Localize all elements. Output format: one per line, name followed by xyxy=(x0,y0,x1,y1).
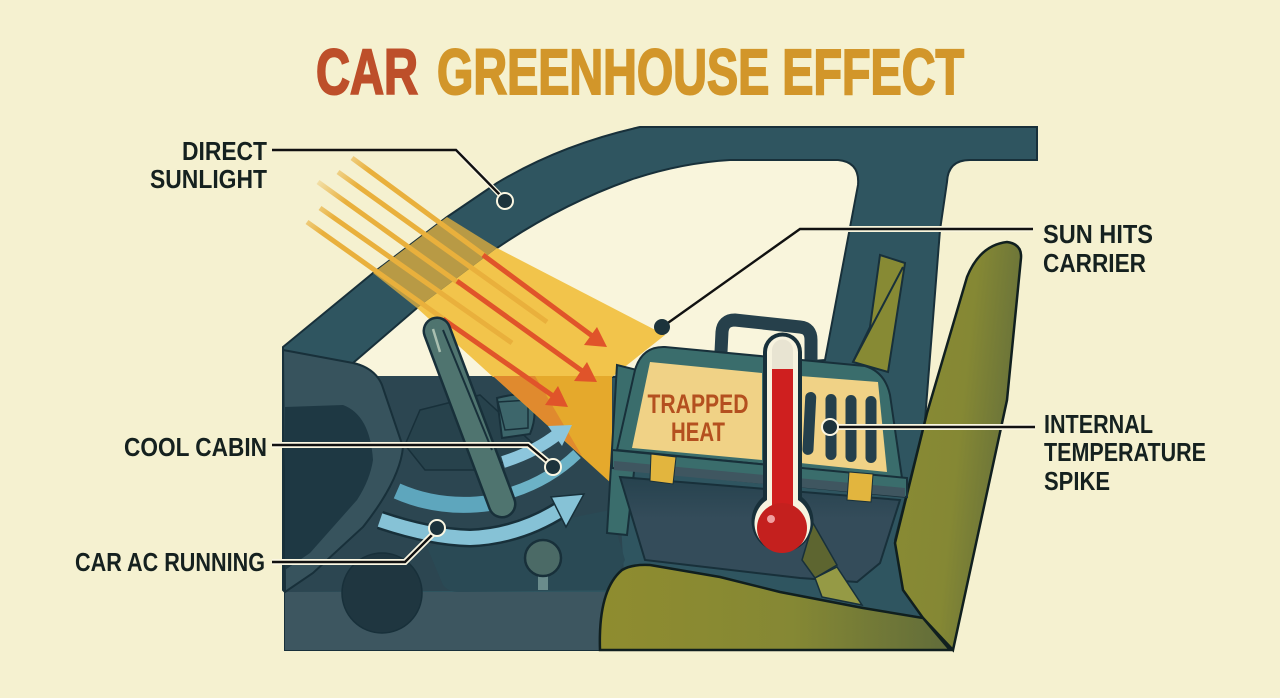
callout: internal temperature spike: INTERNAL xyxy=(1044,409,1153,439)
title xyxy=(316,36,964,108)
orange sun rays with arrowheads xyxy=(443,255,607,407)
callout: sun hits carrier xyxy=(654,219,1153,335)
beam on dashboard xyxy=(493,376,612,484)
callout: direct sunlight: DIRECT xyxy=(182,136,267,166)
carrier base xyxy=(620,477,900,582)
seat backrest xyxy=(895,242,1021,650)
trapped heat text: HEAT xyxy=(671,417,725,447)
cream panel left xyxy=(632,362,762,460)
thermometer xyxy=(752,333,813,553)
clasps xyxy=(650,454,676,484)
callout: cool cabin: COOL CABIN xyxy=(124,432,267,462)
seat cushion xyxy=(600,565,950,650)
sun beam through window xyxy=(417,248,665,377)
callout: sun hits carrier: CARRIER xyxy=(1043,248,1146,278)
seatbelt lower xyxy=(802,523,862,605)
callout: sun hits carrier: SUN HITS xyxy=(1043,219,1153,249)
car frame: roof, A-pillar and B-pillar xyxy=(283,127,1037,650)
pet carrier xyxy=(607,320,907,582)
trapped heat text xyxy=(648,389,748,447)
carrier band xyxy=(612,450,907,497)
window glass xyxy=(353,160,858,377)
callout: direct sunlight: SUNLIGHT xyxy=(150,164,267,194)
gear knob xyxy=(525,540,561,590)
callout: direct sunlight xyxy=(150,136,513,209)
callout: internal temperature spike: SPIKE xyxy=(1044,466,1110,496)
callout: internal temperature spike xyxy=(822,409,1206,496)
callout: internal temperature spike: TEMPERATURE xyxy=(1044,437,1206,467)
door lower panel xyxy=(285,592,605,650)
vent slots xyxy=(802,392,876,463)
callout: car AC running: CAR AC RUNNING xyxy=(75,547,265,577)
sunlight streaks xyxy=(307,158,547,343)
carrier lid xyxy=(617,347,902,478)
steering wheel xyxy=(433,329,502,504)
dashboard xyxy=(283,350,625,633)
seatbelt upper xyxy=(853,255,905,372)
cream panel right xyxy=(800,376,887,472)
title: GREENHOUSE EFFECT xyxy=(437,36,964,108)
callout: cool cabin xyxy=(124,432,561,475)
carrier handle xyxy=(721,320,811,362)
speaker xyxy=(342,553,422,633)
title: CAR xyxy=(316,36,418,108)
beam on A-pillar xyxy=(373,217,497,308)
trapped heat text: TRAPPED xyxy=(648,389,748,419)
callout: car AC running xyxy=(75,520,445,577)
air flow arrows: cool cabin and AC xyxy=(380,425,584,538)
